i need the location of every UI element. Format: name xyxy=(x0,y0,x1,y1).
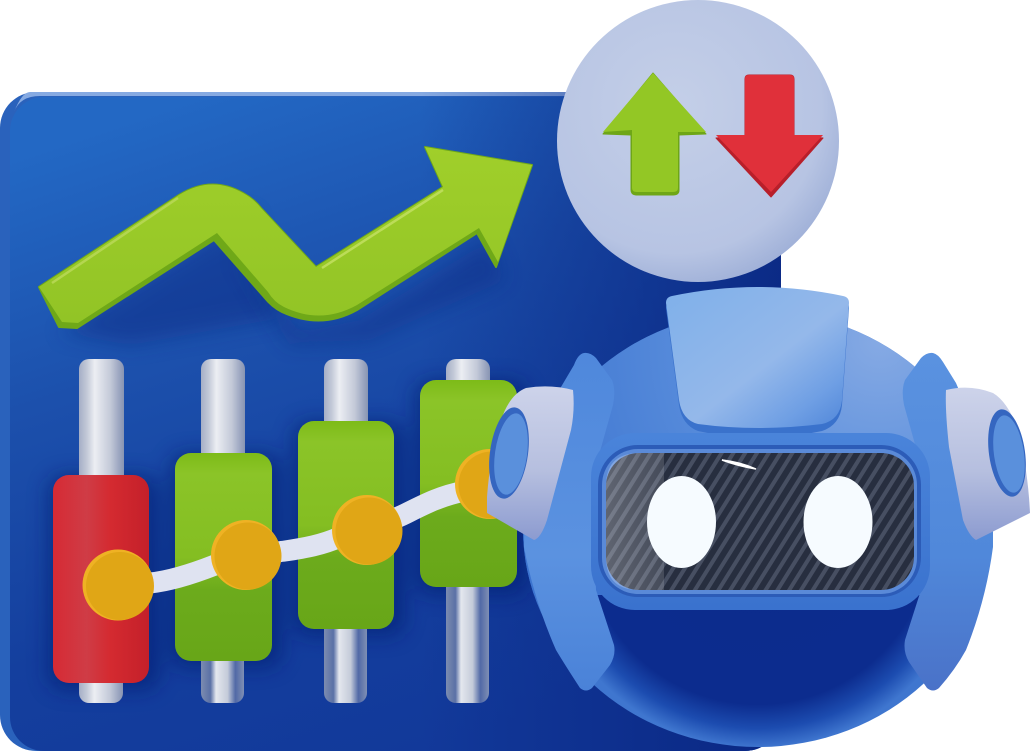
candle 3: green xyxy=(298,359,394,703)
icon: green up arrow xyxy=(603,73,706,195)
right eye xyxy=(804,476,872,568)
left side plate xyxy=(524,353,614,690)
candlestick chart xyxy=(48,359,527,703)
right side plate xyxy=(903,353,993,690)
marker 3 xyxy=(332,495,402,565)
right ear xyxy=(946,388,1030,540)
candle 1: red xyxy=(53,359,149,703)
robot top plate xyxy=(666,287,849,438)
icon: red down arrow xyxy=(716,75,823,197)
marker 1 xyxy=(82,550,154,620)
robot head xyxy=(523,328,924,747)
candle 2: green xyxy=(175,359,272,703)
candle shadows xyxy=(48,380,527,690)
candle 4: green xyxy=(420,359,517,703)
line with gold markers xyxy=(82,449,526,620)
left eye xyxy=(647,476,716,568)
robot xyxy=(484,287,1030,747)
visor xyxy=(591,433,930,610)
marker 2 xyxy=(211,520,282,590)
panel: blue chart board xyxy=(0,92,781,752)
badge: up and down arrows xyxy=(557,0,839,282)
arrow: green rising trend xyxy=(39,147,532,345)
marker 4 xyxy=(455,449,526,519)
left ear xyxy=(484,386,574,540)
